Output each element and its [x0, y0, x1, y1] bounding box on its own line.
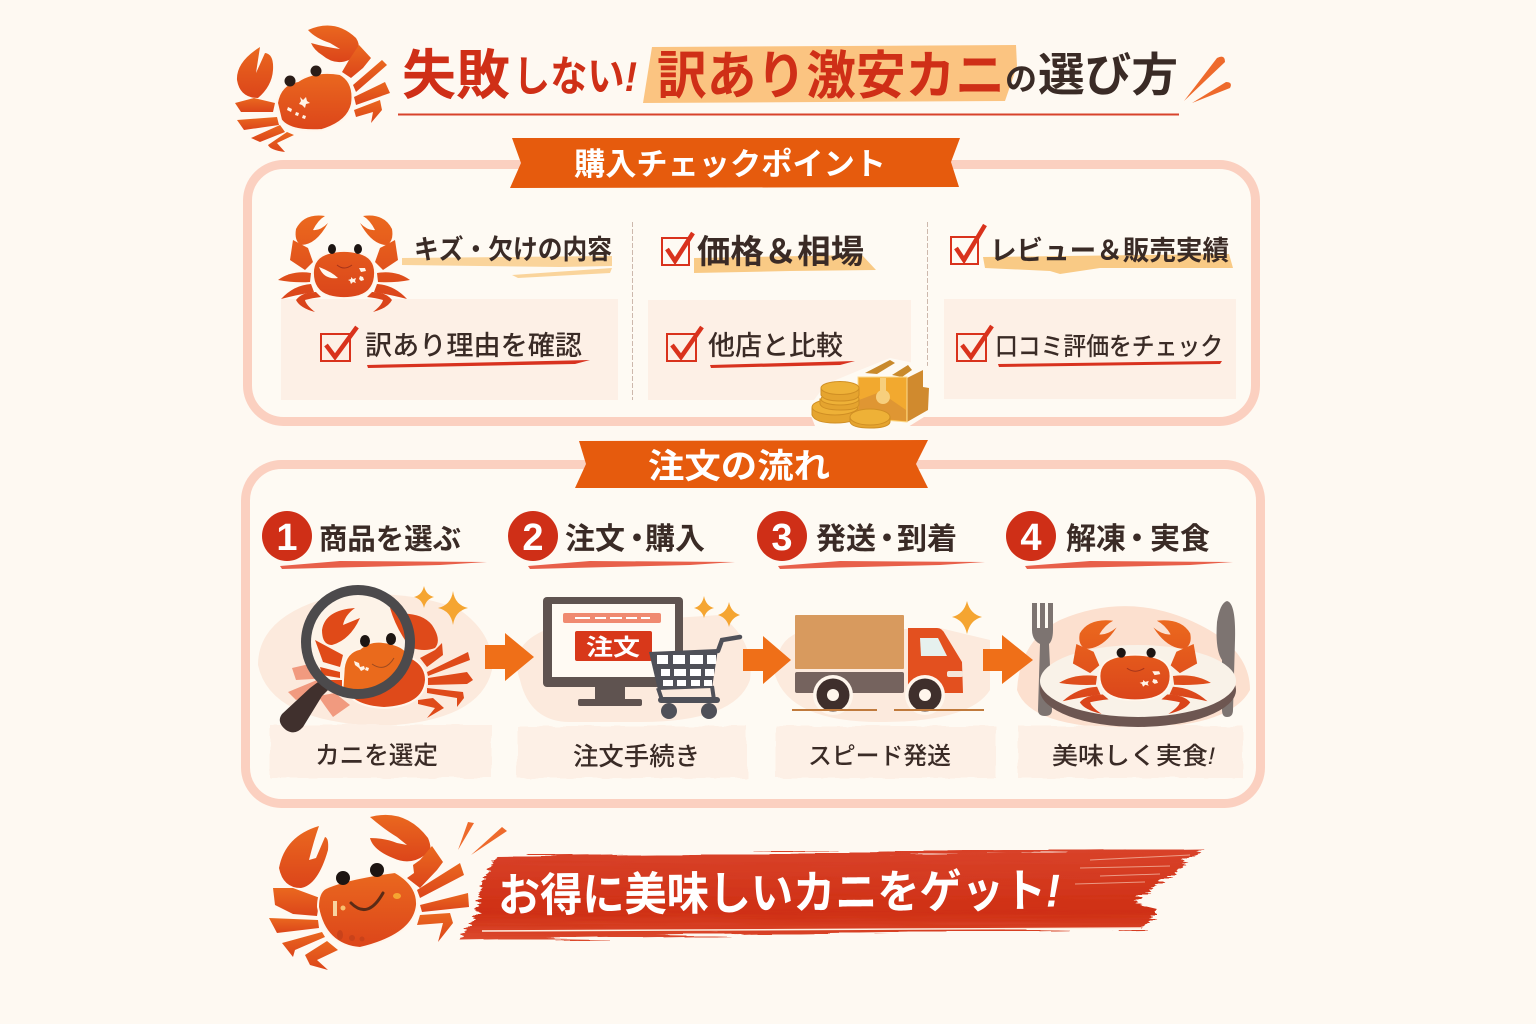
- sparkle: [952, 601, 982, 634]
- step 3 heading: [757, 511, 985, 569]
- step backdrops: [258, 594, 1250, 728]
- magnifier ring: [306, 590, 410, 694]
- title: 選び方: [1038, 49, 1178, 101]
- step 2 heading: [508, 511, 735, 569]
- step 4 heading: 解凍: [1066, 523, 1126, 556]
- icon: accent strokes: [1184, 57, 1231, 103]
- crab inside lens: [311, 595, 405, 689]
- step label plates: [270, 725, 1243, 778]
- icon: checkbox reviews: [957, 326, 992, 361]
- banner: call to action: [460, 848, 1203, 940]
- cart: [649, 637, 740, 719]
- illustration: monitor and cart: [543, 596, 740, 719]
- order button: 注文: [586, 634, 640, 660]
- panel: purchase check points: [248, 164, 1256, 422]
- sparkles: [414, 586, 434, 608]
- step 3 heading: 発送: [816, 523, 876, 556]
- sparkles: [694, 596, 714, 618]
- title underline: [398, 114, 1179, 116]
- step 3 heading: ・: [872, 523, 902, 556]
- brush stroke: [460, 848, 1203, 940]
- step 2 heading: 注文: [565, 523, 625, 556]
- title: の: [1005, 61, 1037, 97]
- dry brush streaks: [1075, 855, 1190, 884]
- icon: checkbox price: [662, 233, 693, 265]
- step 4 heading: [1006, 511, 1233, 569]
- title: [402, 45, 1178, 106]
- text: compare shops: 他店と比較: [708, 331, 843, 361]
- heading: damage: キズ・欠けの内容: [414, 234, 612, 265]
- step 1 heading: 商品を選ぶ: [319, 523, 461, 556]
- title highlight: [643, 45, 1017, 103]
- column dividers: [632, 222, 928, 400]
- banner: order flow: 注文の流れ: [648, 448, 830, 486]
- red underlines: [367, 360, 1222, 368]
- icon: bottom crab: [269, 815, 469, 970]
- arrow 2: [743, 636, 791, 684]
- icon: checkbox compare: [667, 327, 702, 361]
- heading: price: 価格＆相場: [697, 233, 864, 270]
- icon: title crab: [235, 26, 390, 152]
- step 1 heading: 1: [276, 517, 298, 559]
- step 2 heading: 購入: [645, 523, 705, 556]
- text: check reviews: 口コミ評価をチェック: [995, 333, 1223, 361]
- icon: bottom accent strokes: [458, 822, 507, 855]
- step 2 heading: ・: [622, 523, 652, 556]
- icon: checkbox reason: [321, 327, 357, 361]
- icon: winking crab: [278, 216, 410, 312]
- illustration: crab on plate: [1032, 601, 1236, 727]
- step 2 label: 注文手続き: [573, 743, 700, 771]
- step 3 heading: 3: [771, 517, 793, 559]
- heading: review: レビュー＆販売実績: [990, 236, 1229, 266]
- arrow 3: [983, 635, 1033, 684]
- step 3 heading: 到着: [897, 523, 957, 556]
- icon: coins and box: [808, 358, 934, 431]
- step 4 heading: ・: [1122, 523, 1152, 556]
- heading highlight strokes: [402, 254, 1233, 278]
- faded legs outside lens: [288, 662, 350, 717]
- magnifier handle: [280, 682, 328, 732]
- text: check reason: 訳あり理由を確認: [365, 331, 582, 361]
- title: 訳あり激安カニ: [657, 48, 1005, 106]
- title: しない!: [513, 53, 637, 100]
- banner: purchase check points: 購入チェックポイント: [574, 147, 886, 182]
- arrow 1: [485, 633, 534, 681]
- step 4 label: 美味しく実食 !: [1052, 743, 1215, 770]
- step 1 label: カニを選定: [315, 742, 438, 770]
- sub panel 3: [944, 299, 1236, 399]
- step 3 label: スピード発送: [808, 743, 951, 770]
- knife: [1217, 601, 1235, 717]
- banner: purchase check points: [510, 138, 960, 188]
- crab outside lens: [343, 614, 473, 718]
- sub panel 1: [281, 299, 618, 400]
- fork: [1032, 603, 1053, 716]
- step 4 heading: 4: [1020, 517, 1042, 559]
- step 4 heading: 実食: [1150, 523, 1210, 556]
- illustration: delivery truck: [792, 601, 984, 715]
- sub panel 2: [648, 300, 911, 400]
- banner: call to action: お得に美味しいカニをゲット!: [498, 865, 1060, 921]
- icon: checkbox review: [951, 225, 985, 264]
- illustration: crab under magnifier: [280, 586, 473, 732]
- step 1 heading: [262, 511, 487, 569]
- banner: order flow: [575, 440, 928, 488]
- plate: [1040, 653, 1236, 727]
- order button: [575, 631, 652, 661]
- step 2 heading: 2: [522, 517, 544, 559]
- title: 失敗: [402, 46, 510, 106]
- panel: order flow: [246, 464, 1260, 804]
